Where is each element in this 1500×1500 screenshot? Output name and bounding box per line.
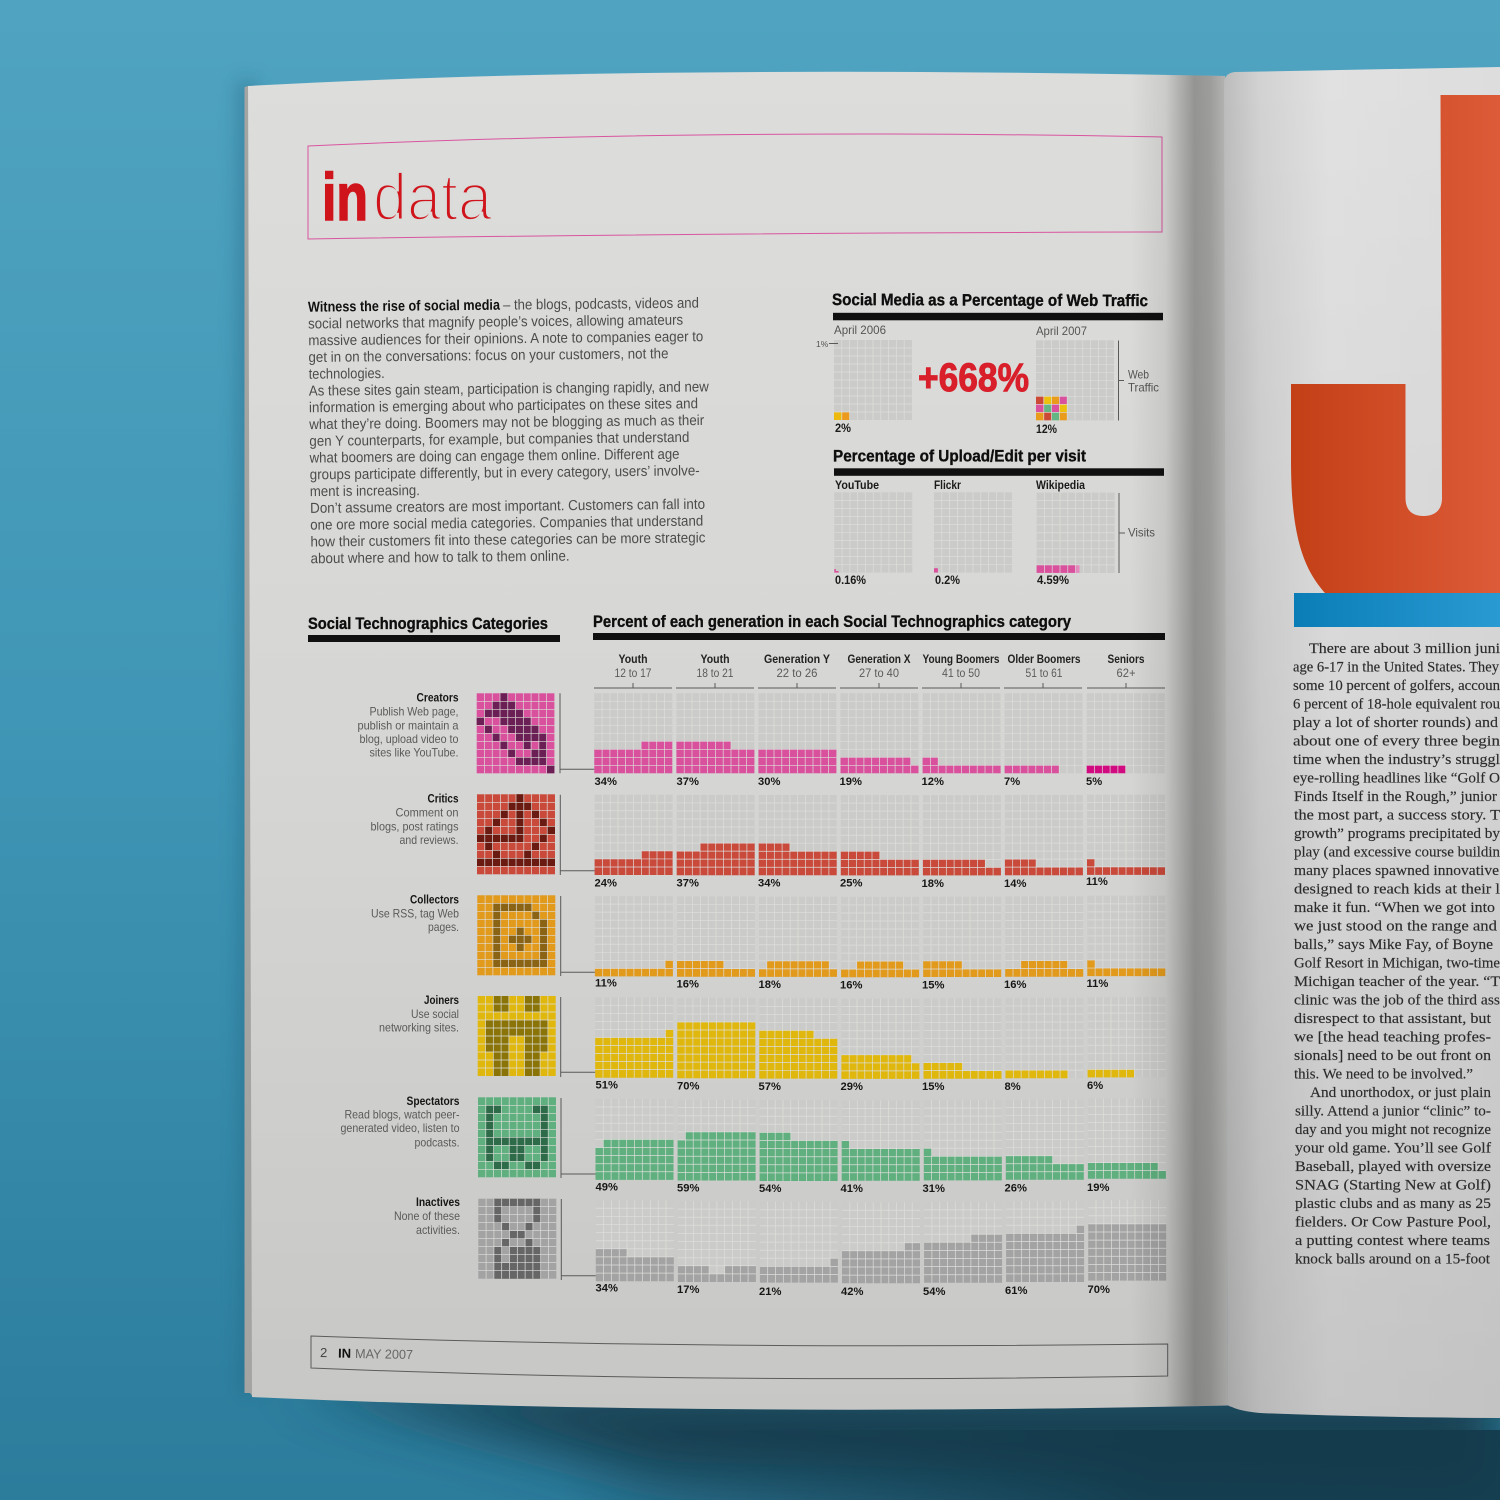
- article text column: Golf Resort in Michigan, two-time: [1294, 956, 1500, 972]
- heading: percent of each generation: Percent of each generation in each Social Technographics category: [593, 613, 1072, 631]
- icon: hourglass: [478, 1199, 556, 1279]
- chart: Spectators Youth 12-17 49%: 49%: [596, 1182, 618, 1194]
- chart: Inactives Generation X 42%: [841, 1202, 920, 1298]
- waffle: April 2006: [816, 323, 912, 435]
- row: Critics: [370, 792, 1165, 890]
- row: Inactives: [394, 1195, 1166, 1298]
- column: Young Boomers: [922, 654, 1000, 688]
- chart: Creators Older Boomers 7%: [1004, 693, 1083, 788]
- column: Generation Y: Generation Y: [764, 654, 830, 666]
- icon: star: [477, 794, 555, 874]
- waffle: April 2007: 12%: [1036, 422, 1057, 436]
- article text column: designed to reach kids at their l: [1294, 882, 1500, 898]
- article text column: plastic clubs and as many as 25: [1295, 1196, 1491, 1212]
- intro text block: gen Y counterparts, for example, but companies that understand: [309, 430, 689, 450]
- waffle: April 2006: 2%: [835, 421, 851, 435]
- chart: Spectators Youth 18-21 59%: [677, 1100, 756, 1194]
- panel: right magazine page: [1224, 67, 1500, 1418]
- article text column: your old game. You’ll see Golf: [1295, 1140, 1491, 1156]
- heading: percent of each generation: [593, 613, 1165, 640]
- column: Youth 18 to 21: [676, 654, 754, 688]
- label: Collectors: [371, 892, 459, 934]
- intro text block: what they’re doing. Boomers may not be blogging as much as their: [308, 413, 704, 433]
- title: indata: in: [322, 160, 368, 235]
- chart: Inactives Youth 18-21 17%: [677, 1201, 756, 1296]
- chart: Spectators Young Boomers 31%: [922, 1100, 1002, 1195]
- article text column: the most part, a success story. T: [1294, 808, 1500, 824]
- article text column: And unorthodox, or just plain: [1310, 1085, 1492, 1101]
- label: Critics: Comment on: [396, 806, 458, 820]
- intro text block: As these sites gain steam, participation is changing rapidly, and new: [309, 379, 709, 400]
- chart: Inactives Older Boomers 61%: 61%: [1005, 1285, 1027, 1297]
- label: Collectors: pages.: [428, 920, 459, 934]
- intro text block: how their customers fit into these categories can be more strategic: [310, 530, 705, 550]
- article text column: There are about 3 million juni: [1309, 641, 1500, 657]
- masthead box with title: [308, 134, 1162, 239]
- chart: Inactives Generation Y 21%: 21%: [759, 1286, 781, 1298]
- connector: [561, 1098, 600, 1178]
- chart: Spectators Generation Y 54%: [759, 1100, 838, 1195]
- label: Creators: sites like YouTube.: [370, 746, 458, 760]
- article text column: about one of every three begin: [1293, 734, 1500, 750]
- bracket: web traffic: Web: [1128, 368, 1149, 382]
- article text column: sionals] need to be out front on: [1294, 1048, 1492, 1064]
- magazine cast shadow: [236, 80, 1500, 1500]
- chart: Collectors Older Boomers 16%: [1004, 896, 1083, 991]
- intro text block: social networks that magnify people’s voices, allowing amateurs: [308, 313, 683, 332]
- label: Collectors: Collectors: [410, 892, 459, 906]
- column: Older Boomers: [1004, 654, 1082, 688]
- chart: Joiners Young Boomers 15%: 15%: [922, 1081, 944, 1093]
- icon: two people: [478, 996, 556, 1076]
- connector: [560, 693, 598, 773]
- chart: Critics Seniors 11%: 11%: [1086, 876, 1108, 888]
- chart: Creators Youth 18-21 37%: 37%: [676, 776, 699, 788]
- waffle: Flickr: [934, 478, 1012, 587]
- article text column: Baseball, played with oversize: [1295, 1159, 1491, 1175]
- intro text block: – the blogs, podcasts, videos and: [503, 296, 699, 314]
- chart: Collectors Older Boomers 16%: 16%: [1004, 979, 1026, 991]
- label: Creators: [358, 691, 459, 760]
- chart: Spectators Generation X 41%: [840, 1100, 920, 1195]
- gutter shadow on left page: [1146, 75, 1228, 1407]
- article text column: some 10 percent of golfers, accoun: [1293, 678, 1500, 694]
- chart: Collectors Youth 12-17 11%: 11%: [595, 978, 617, 990]
- column: Generation X: [840, 654, 918, 688]
- label: Spectators: generated video, listen to: [340, 1121, 460, 1135]
- column: Youth 12 to 17: Youth: [618, 654, 648, 666]
- intro text block: ment is increasing.: [310, 483, 420, 500]
- article text column: time when the industry’s struggl: [1293, 752, 1500, 768]
- footer box: folio: 2: [320, 1345, 327, 1360]
- chart: Joiners Seniors 6%: [1087, 997, 1166, 1092]
- footer box: folio: IN: [338, 1346, 351, 1361]
- chart: Critics Young Boomers 18%: 18%: [922, 878, 944, 890]
- waffle: Flickr: 0.2%: [935, 573, 960, 587]
- chart: Joiners Youth 12-17 51%: [595, 997, 673, 1092]
- icon: bookmark tag: [477, 895, 555, 975]
- label: Creators: publish or maintain a: [358, 718, 459, 732]
- label: Spectators: Spectators: [406, 1094, 460, 1108]
- column: Seniors: [1087, 654, 1165, 688]
- heading: upload/edit: Percentage of Upload/Edit per visit: [833, 448, 1086, 466]
- chart: Critics Youth 18-21 37%: [676, 795, 755, 890]
- label: Creators: blog, upload video to: [360, 732, 459, 746]
- bracket: web traffic: Traffic: [1128, 380, 1159, 394]
- chart: Critics Generation Y 34%: 34%: [758, 878, 780, 890]
- intro text block: what boomers are doing can engage them online. Different age: [309, 447, 680, 467]
- chart: Critics Youth 18-21 37%: 37%: [676, 878, 699, 890]
- column: Seniors: Seniors: [1108, 654, 1144, 666]
- chart: Critics Youth 12-17 24%: [594, 795, 673, 890]
- chart: Collectors Generation X 16%: 16%: [840, 979, 862, 991]
- waffle: YouTube: YouTube: [835, 478, 879, 492]
- column: Generation X: 27 to 40: [859, 668, 899, 680]
- chart: Inactives Seniors 70%: [1088, 1200, 1166, 1296]
- connector: [560, 795, 599, 875]
- intro text block: one ore more social media categories. Companies that understand: [310, 514, 703, 534]
- article text column: a putting contest where teams: [1295, 1233, 1490, 1249]
- chart: Creators Youth 12-17 34%: 34%: [594, 776, 617, 788]
- chart: Creators Young Boomers 12%: [922, 693, 1001, 788]
- row: Collectors: [371, 892, 1165, 992]
- chart: Joiners Youth 18-21 70%: 70%: [677, 1080, 699, 1092]
- label: Inactives: [394, 1195, 460, 1237]
- chart: Critics Youth 12-17 24%: 24%: [594, 878, 617, 890]
- generation column headers: [594, 654, 1165, 688]
- article text column: we [the head teaching profes-: [1294, 1030, 1491, 1046]
- label: Critics: blogs, post ratings: [370, 820, 458, 834]
- article text column: this. We need to be involved.”: [1294, 1066, 1473, 1082]
- chart: Critics Seniors 11%: [1086, 795, 1165, 888]
- panel: left magazine page: [244, 72, 1228, 1410]
- blue bar: [1294, 593, 1500, 627]
- column: Youth 18 to 21: Youth: [700, 654, 730, 666]
- intro text block: about where and how to talk to them online.: [311, 549, 570, 567]
- chart: Inactives Generation X 42%: 42%: [841, 1286, 863, 1298]
- chart: Joiners Youth 18-21 70%: [677, 998, 755, 1092]
- waffle: Wikipedia: Wikipedia: [1036, 478, 1085, 492]
- chart: Creators Seniors 5%: 5%: [1086, 776, 1102, 788]
- article text column: growth” programs precipitated by: [1294, 826, 1500, 842]
- column: Youth 12 to 17: [594, 654, 672, 688]
- article text column: 6 percent of 18-hole equivalent rou: [1293, 696, 1500, 712]
- article text column: clinic was the job of the third ass: [1294, 992, 1500, 1008]
- article text column: eye-rolling headlines like “Golf O: [1293, 770, 1500, 786]
- article text column: we just stood on the range and: [1294, 918, 1498, 934]
- large red letter J: [1291, 95, 1500, 593]
- waffle: April 2006: April 2006: [834, 323, 886, 337]
- chart: Spectators Young Boomers 31%: 31%: [922, 1183, 945, 1195]
- chart: Joiners Seniors 6%: 6%: [1087, 1080, 1103, 1092]
- chart: Joiners Generation Y 57%: [758, 998, 837, 1093]
- label: Spectators: [340, 1094, 460, 1150]
- chart: Creators Generation X 19%: 19%: [840, 776, 862, 788]
- footer box: folio: [311, 1336, 1168, 1379]
- intro text block: information is emerging about who participates on these sites and: [309, 396, 698, 416]
- article text column: knock balls around on a 15-foot: [1295, 1252, 1491, 1268]
- intro text block: massive audiences for their opinions. A note to companies eager to: [308, 329, 703, 349]
- column: Young Boomers: Young Boomers: [922, 654, 1000, 666]
- chart: Collectors Seniors 11%: 11%: [1086, 978, 1108, 990]
- heading: Social Technographics Categories: Social Technographics Categories: [308, 615, 548, 633]
- chart: Spectators Older Boomers 26%: 26%: [1004, 1182, 1027, 1194]
- article text column: silly. Attend a junior “clinic” to-: [1295, 1104, 1491, 1120]
- connector: [561, 896, 600, 976]
- title: indata: data: [373, 160, 493, 235]
- chart: Inactives Young Boomers 54%: [923, 1202, 1002, 1298]
- chart: Critics Young Boomers 18%: [922, 795, 1001, 890]
- intro text block: Witness the rise of social media: [308, 298, 501, 316]
- chart: Joiners Young Boomers 15%: [922, 998, 1002, 1093]
- panel: social media as a percentage of web traffic: [816, 291, 1163, 436]
- column: Older Boomers: 51 to 61: [1026, 668, 1062, 680]
- waffle: Wikipedia: [1036, 478, 1115, 587]
- chart: Creators Youth 18-21 37%: [676, 693, 754, 788]
- column: Youth 12 to 17: 12 to 17: [614, 668, 652, 680]
- waffle: April 2007: [1036, 324, 1114, 436]
- intro text block: technologies.: [309, 366, 385, 383]
- icon: glasses: [478, 1097, 556, 1177]
- label: Critics: Critics: [428, 792, 459, 806]
- chart: Creators Young Boomers 12%: 12%: [922, 776, 944, 788]
- article text column: Finds Itself in the Rough,” junior: [1294, 789, 1497, 805]
- row: Joiners: [379, 993, 1166, 1093]
- chart: Spectators Generation X 41%: 41%: [840, 1183, 863, 1195]
- label: Inactives: activities.: [416, 1223, 460, 1237]
- waffle: Wikipedia: 4.59%: [1037, 573, 1069, 587]
- intro text block: [307, 296, 711, 567]
- title: indata: [322, 160, 493, 235]
- row: Spectators: [340, 1094, 1166, 1195]
- column: Generation X: Generation X: [848, 654, 911, 666]
- article text column: disrespect to that assistant, but: [1294, 1011, 1492, 1027]
- chart: Joiners Generation X 29%: [840, 999, 919, 1093]
- connector: [561, 1199, 600, 1280]
- heading: Social Technographics Categories: [308, 615, 560, 642]
- article text column: play (and excessive course buildin: [1294, 844, 1500, 860]
- waffle: April 2006: 1%: [816, 339, 829, 349]
- chart: Spectators Older Boomers 26%: [1004, 1100, 1084, 1194]
- chart: Spectators Youth 12-17 49%: [596, 1099, 674, 1194]
- intro text block: Don’t assume creators are most important. Customers can fall into: [310, 497, 705, 517]
- chart: Inactives Generation Y 21%: [759, 1202, 838, 1298]
- chart: Creators Youth 12-17 34%: [594, 693, 672, 788]
- label: Inactives: None of these: [394, 1209, 460, 1223]
- bracket: visits: Visits: [1128, 526, 1155, 540]
- chart: Spectators Seniors 19%: [1087, 1098, 1166, 1194]
- chart: Creators Generation X 19%: [840, 693, 918, 788]
- chart: Spectators Generation Y 54%: 54%: [759, 1183, 781, 1195]
- article text column: day and you might not recognize: [1295, 1122, 1491, 1138]
- intro text block: groups participate differently, but in every category, users’ involve-: [310, 463, 700, 483]
- bracket: web traffic: [1118, 340, 1159, 420]
- chart: Collectors Young Boomers 15%: [922, 897, 1001, 992]
- chart: Critics Generation X 25%: [840, 795, 919, 890]
- chart: Collectors Youth 12-17 11%: [595, 896, 673, 990]
- column: Older Boomers: Older Boomers: [1008, 654, 1080, 666]
- label: Inactives: Inactives: [416, 1195, 460, 1209]
- chart: Critics Generation Y 34%: [758, 795, 837, 890]
- waffle: YouTube: [834, 478, 912, 587]
- panel: percentage of upload/edit per visit: [833, 448, 1164, 587]
- chart: Collectors Generation X 16%: [840, 897, 919, 991]
- chart: Inactives Youth 12-17 34%: 34%: [596, 1283, 618, 1295]
- label: Joiners: Joiners: [424, 993, 459, 1007]
- chart: Collectors Youth 18-21 16%: 16%: [676, 979, 699, 991]
- chart: Spectators Youth 18-21 59%: 59%: [677, 1182, 699, 1194]
- column: Youth 18 to 21: 18 to 21: [696, 668, 734, 680]
- column: Young Boomers: 41 to 50: [942, 668, 980, 680]
- column: Generation Y: 22 to 26: [776, 668, 818, 680]
- chart: Joiners Generation Y 57%: 57%: [758, 1081, 781, 1093]
- chart: Collectors Seniors 11%: [1086, 896, 1165, 990]
- chart: Joiners Older Boomers 8%: 8%: [1004, 1081, 1021, 1093]
- icon: pencil: [477, 693, 554, 773]
- column: Seniors: 62+: [1116, 668, 1136, 680]
- article text column: fielders. Or Cow Pasture Pool,: [1295, 1214, 1491, 1230]
- row: Creators: [358, 691, 1165, 788]
- label: Critics: [370, 792, 459, 847]
- heading: web traffic: Social Media as a Percentage of Web Traffic: [832, 291, 1148, 310]
- chart: Inactives Seniors 70%: 70%: [1088, 1284, 1110, 1296]
- chart: Joiners Generation X 29%: 29%: [840, 1081, 863, 1093]
- intro text block: get in on the conversations: focus on your customers, not the: [308, 346, 669, 366]
- label: Creators: Creators: [416, 691, 459, 705]
- footer box: folio: MAY 2007: [355, 1346, 413, 1362]
- chart: Creators Seniors 5%: [1086, 693, 1165, 788]
- chart: Inactives Older Boomers 61%: [1005, 1201, 1084, 1297]
- waffle: April 2007: April 2007: [1036, 324, 1087, 338]
- chart: Spectators Seniors 19%: 19%: [1087, 1182, 1109, 1194]
- label: Creators: Publish Web page,: [370, 705, 458, 719]
- chart: Creators Generation Y 30%: [758, 693, 836, 788]
- label: Joiners: [379, 993, 459, 1034]
- label: Joiners: networking sites.: [379, 1020, 459, 1034]
- chart: Collectors Young Boomers 15%: 15%: [922, 980, 944, 992]
- article text column: play a lot of shorter rounds) and: [1293, 715, 1499, 731]
- label: Collectors: Use RSS, tag Web: [371, 907, 459, 921]
- chart: Collectors Generation Y 18%: [758, 897, 837, 991]
- connector: [561, 997, 600, 1077]
- column: Generation Y: [758, 654, 836, 688]
- article text column: age 6-17 in the United States. They: [1293, 660, 1499, 676]
- chart: Critics Older Boomers 14%: 14%: [1004, 878, 1026, 890]
- label: Spectators: podcasts.: [414, 1136, 460, 1150]
- chart: Critics Generation X 25%: 25%: [840, 878, 862, 890]
- chart: Inactives Young Boomers 54%: 54%: [923, 1286, 945, 1298]
- chart: Inactives Youth 18-21 17%: 17%: [677, 1284, 699, 1296]
- chart: Creators Older Boomers 7%: 7%: [1004, 776, 1020, 788]
- chart: Joiners Youth 12-17 51%: 51%: [596, 1080, 618, 1092]
- chart: Collectors Generation Y 18%: 18%: [758, 979, 781, 991]
- article text column: SNAG (Starting New at Golf): [1295, 1178, 1491, 1194]
- article text column: Michigan teacher of the year. “T: [1294, 974, 1500, 990]
- article text column: balls,” says Mike Fay, of Boyne: [1294, 937, 1493, 953]
- label: Critics: and reviews.: [400, 833, 458, 847]
- chart: Inactives Youth 12-17 34%: [596, 1200, 674, 1295]
- bracket: visits: [1119, 493, 1155, 573]
- chart: Creators Generation Y 30%: 30%: [758, 776, 780, 788]
- article text column: many places spawned innovative: [1294, 863, 1499, 879]
- chart: Critics Older Boomers 14%: [1004, 795, 1083, 890]
- article text column: [1293, 641, 1500, 1268]
- label: Joiners: Use social: [411, 1007, 459, 1021]
- big number: +668%: +668%: [918, 356, 1029, 400]
- waffle: YouTube: 0.16%: [835, 573, 866, 587]
- article text column: make it fun. “When we got into: [1294, 900, 1495, 916]
- waffle: Flickr: Flickr: [934, 478, 961, 492]
- chart: Collectors Youth 18-21 16%: [676, 896, 755, 991]
- label: Spectators: Read blogs, watch peer-: [344, 1107, 460, 1121]
- chart: Joiners Older Boomers 8%: [1004, 998, 1084, 1093]
